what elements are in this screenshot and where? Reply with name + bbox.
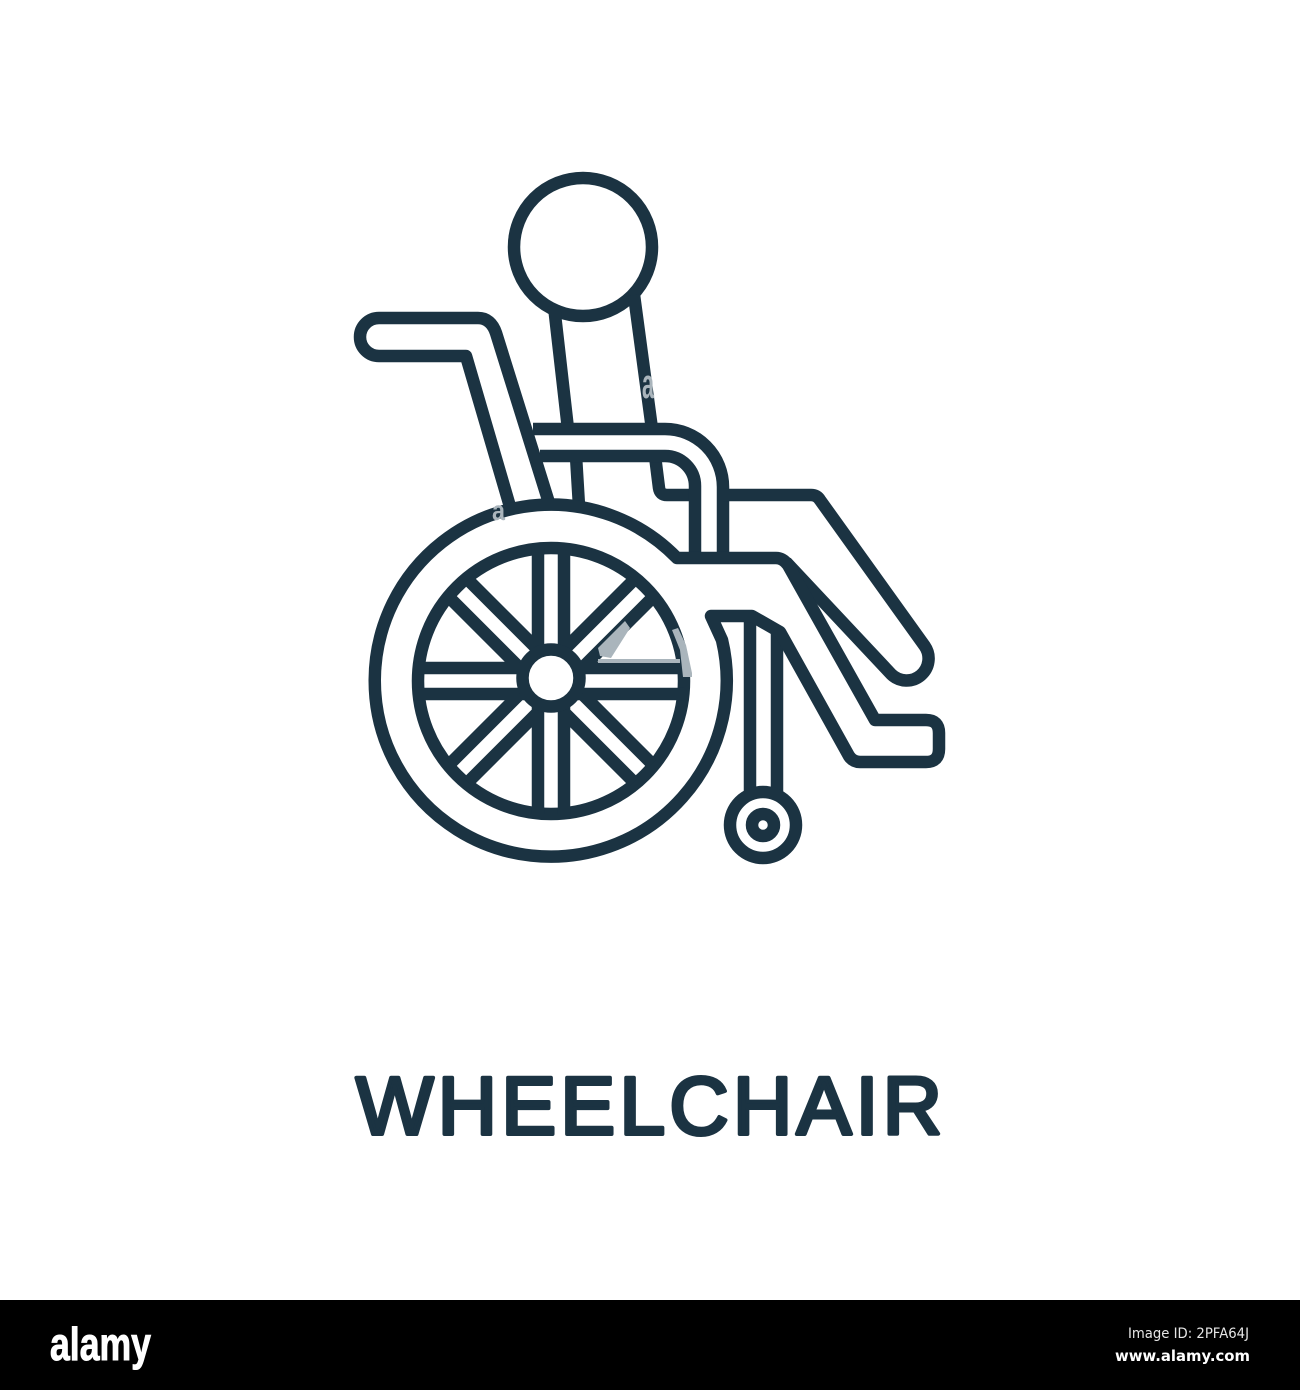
icon: caster fork: [750, 616, 777, 792]
icon: wheel spokes: [418, 548, 684, 814]
icon: wheelchair: [360, 178, 939, 858]
icon: torso: [554, 295, 695, 506]
icon: armrest: [533, 429, 723, 560]
icon: leg rest: [723, 495, 929, 680]
icon: caster wheel: [730, 792, 796, 858]
title: WHEELCHAIR: [356, 1061, 942, 1152]
watermark fragments: a: [642, 360, 654, 407]
footer bar: [0, 1300, 1300, 1390]
footer logo: alamy: [50, 1318, 151, 1370]
icon: wheel rim: [418, 548, 684, 814]
icon: large wheel tire, frame and foot rest: [375, 505, 939, 857]
image id: Image ID: 2PFA64J: [1128, 1326, 1249, 1342]
icon: wheel hub: [522, 650, 580, 706]
website: www.alamy.com: [1115, 1347, 1250, 1365]
watermark fragments: a: [492, 495, 505, 526]
icon: head: [514, 178, 652, 316]
watermark fragments: [492, 360, 692, 677]
icon: push handle: [360, 318, 550, 510]
icon: caster hub: [752, 814, 774, 836]
